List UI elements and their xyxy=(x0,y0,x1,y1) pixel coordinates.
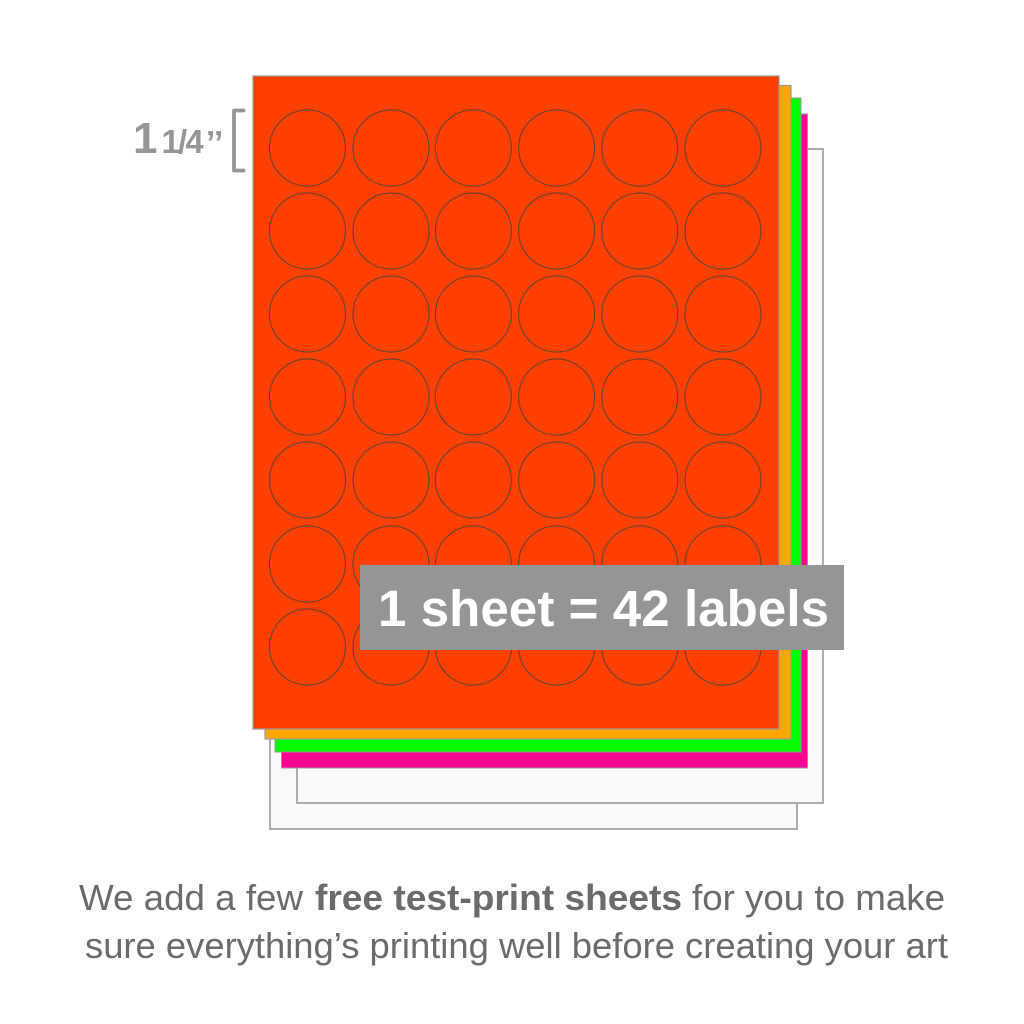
size dimension label xyxy=(133,114,223,163)
red-orange front sheet with 42 circular labels xyxy=(253,76,779,729)
caption: for you to make xyxy=(692,877,945,918)
size dimension label: 1 xyxy=(133,114,157,163)
callout: sheet count xyxy=(360,565,844,650)
caption: sure everything’s printing well before creating your art xyxy=(85,925,948,966)
white test-print sheet, rear right xyxy=(297,149,823,803)
caption xyxy=(79,877,948,966)
size dimension label: 1/4 xyxy=(162,123,204,160)
white test-print sheet, rear left xyxy=(270,175,797,829)
callout: sheet count: 1 sheet = 42 labels xyxy=(378,580,829,637)
green sheet xyxy=(275,98,801,752)
caption: We add a few xyxy=(79,877,304,918)
pink sheet xyxy=(282,114,808,768)
caption: free test-print sheets xyxy=(315,877,682,918)
orange sheet xyxy=(265,86,791,739)
size bracket xyxy=(234,110,244,170)
size dimension label: ’’ xyxy=(206,124,223,161)
